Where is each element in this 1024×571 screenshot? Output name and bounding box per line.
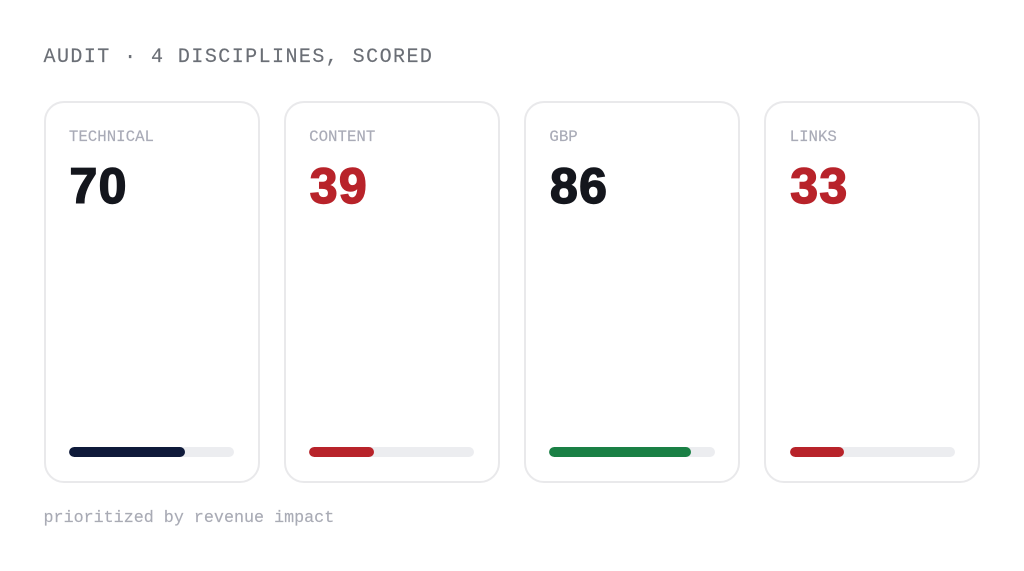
progress bar: content	[309, 447, 474, 457]
progress bar: technical	[69, 447, 234, 457]
score: 86: 86	[550, 158, 608, 214]
score: 39: 39	[310, 158, 368, 214]
panel: technical	[44, 100, 260, 482]
footer note: prioritized by revenue impact	[44, 509, 334, 528]
progress bar: links	[790, 447, 955, 457]
score: 70: 70	[70, 158, 128, 214]
label: links: LINKS	[790, 128, 837, 146]
progress bar: gbp	[549, 447, 715, 457]
label: content: CONTENT	[309, 128, 375, 146]
title: AUDIT · 4 DISCIPLINES, SCORED	[44, 46, 433, 69]
panel: content	[284, 100, 500, 482]
score: 33: 33	[790, 158, 848, 214]
label: technical: TECHNICAL	[69, 128, 154, 146]
panel: gbp	[524, 100, 740, 482]
label: gbp: GBP	[549, 128, 578, 146]
panel: links	[764, 100, 980, 482]
